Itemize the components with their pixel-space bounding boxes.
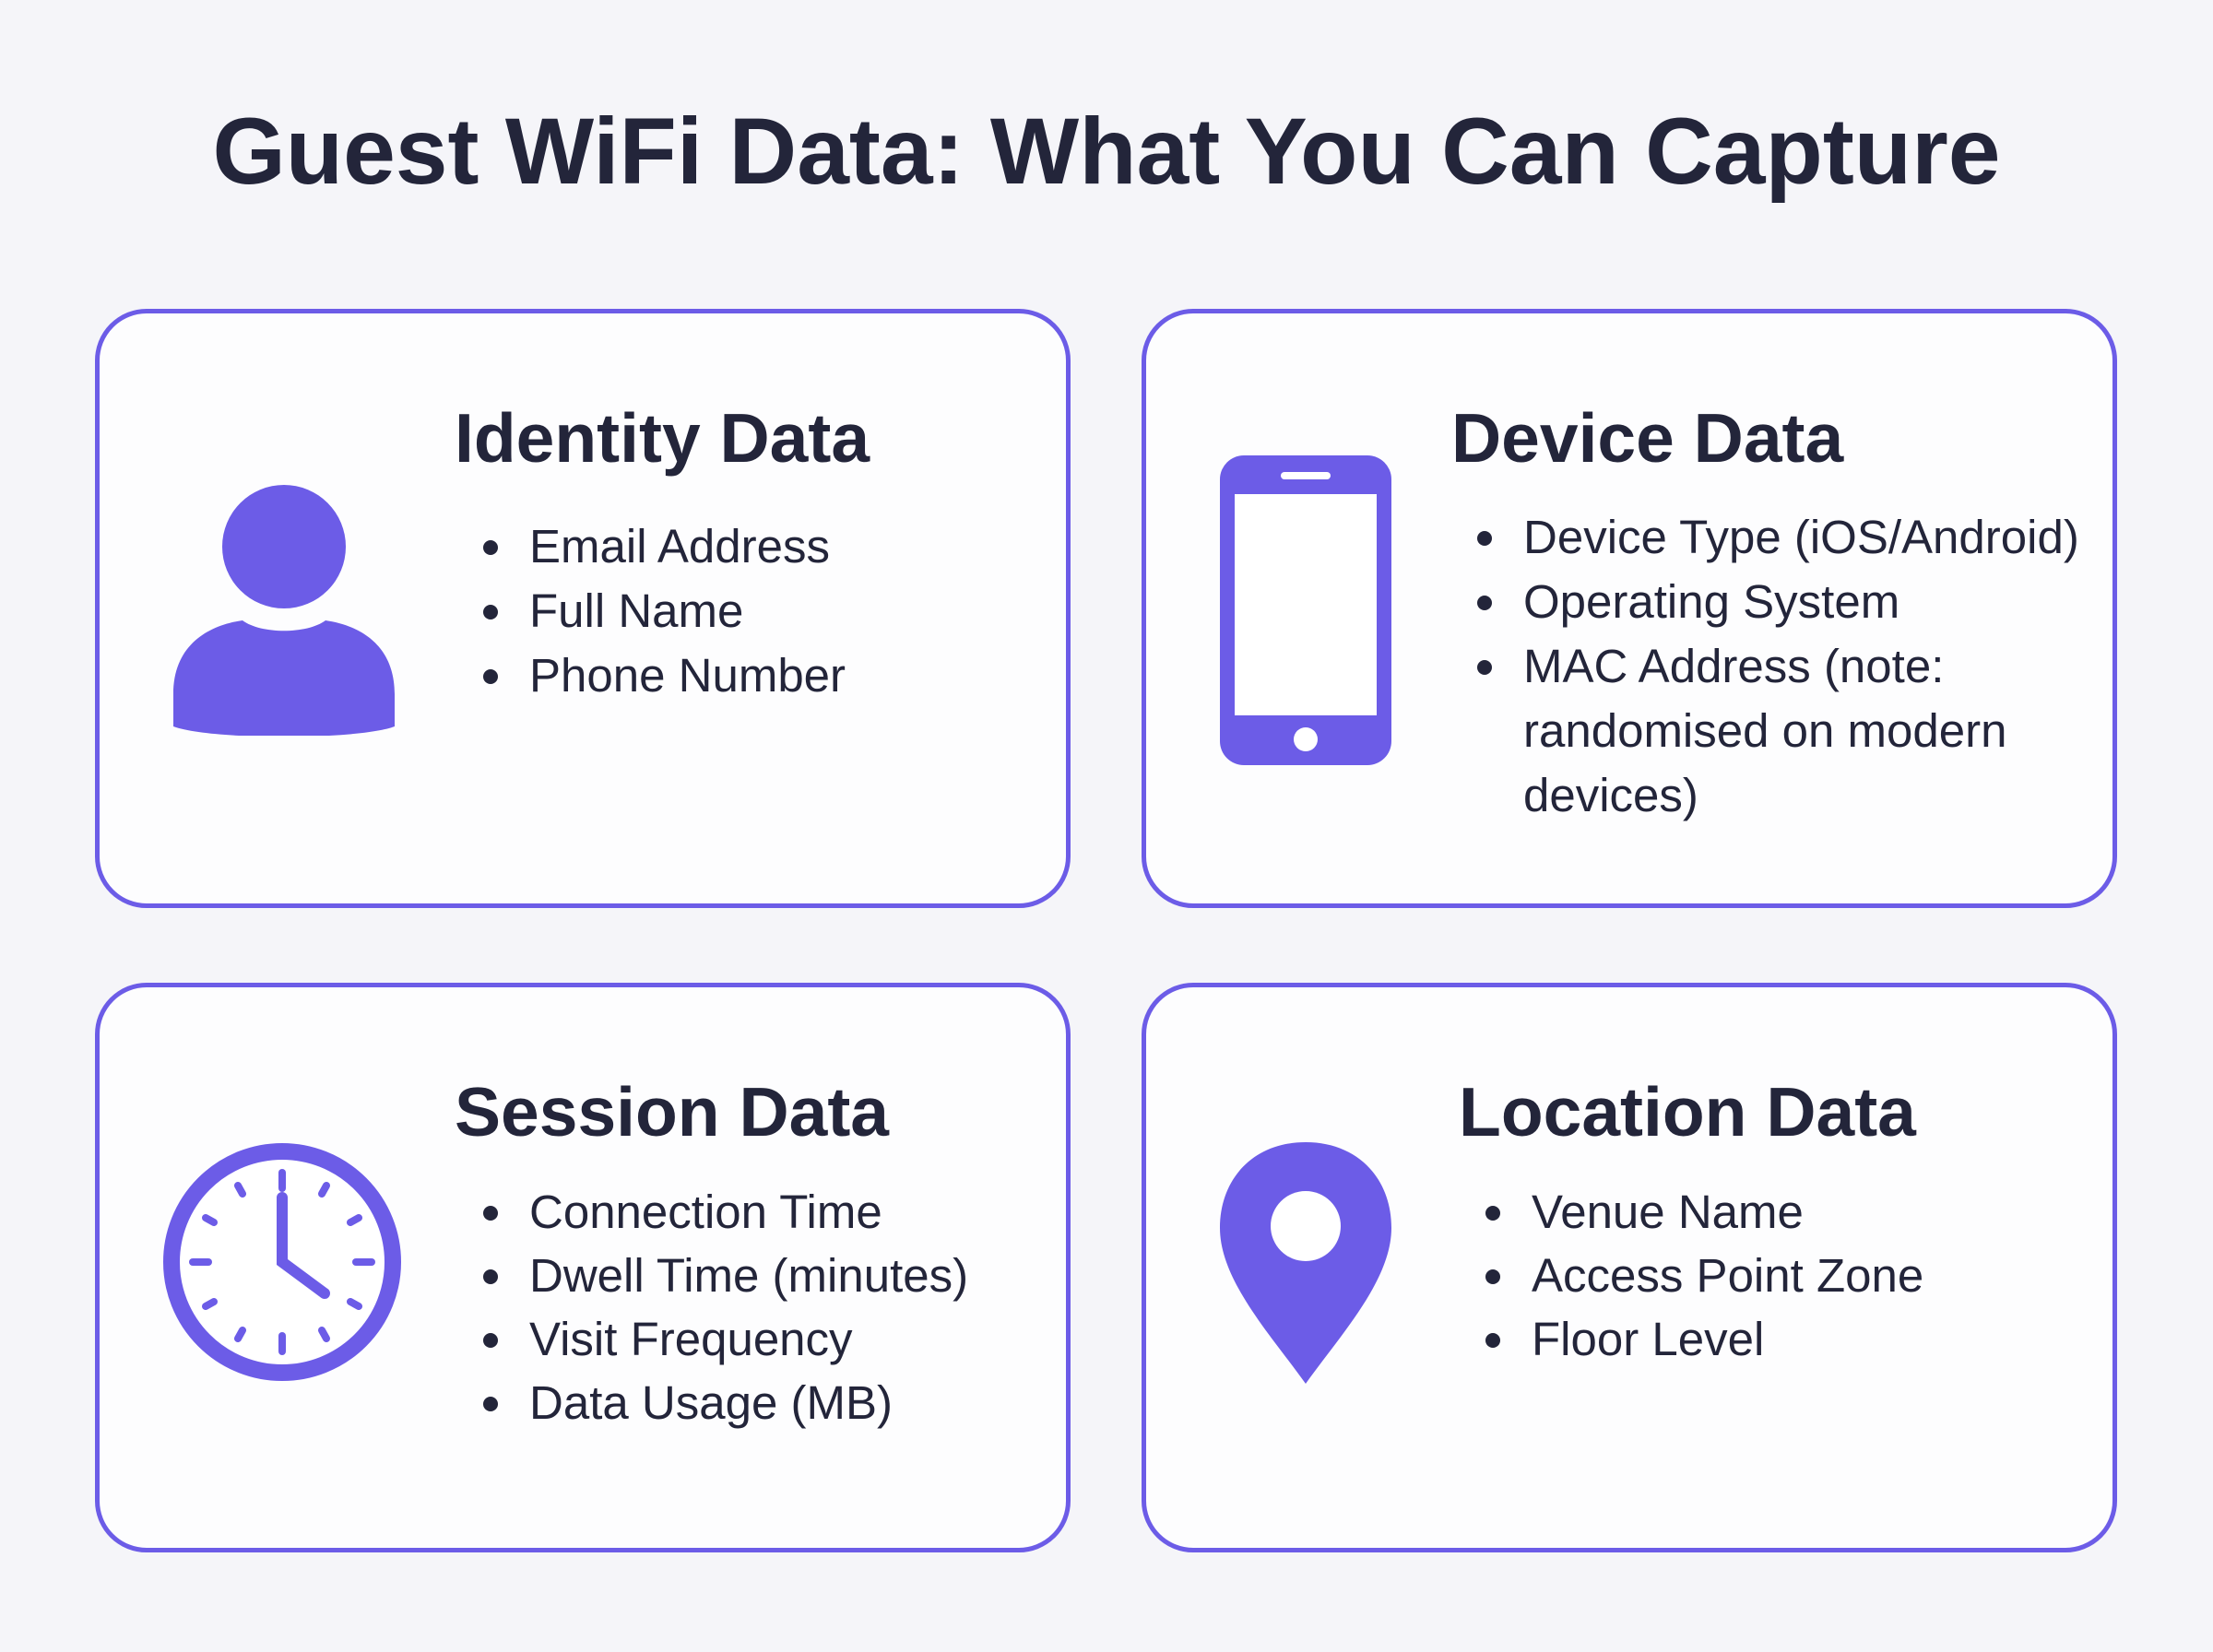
title: Guest WiFi Data: What You Can Capture xyxy=(212,99,2001,204)
heading: location: Location Data xyxy=(1459,1073,1916,1150)
panel: location xyxy=(1142,983,2117,1552)
icon: map pin xyxy=(1220,1142,1391,1384)
list: device xyxy=(1477,511,2079,821)
list: session: Connection Time xyxy=(529,1186,882,1238)
panel: identity xyxy=(95,309,1071,908)
list: session: Visit Frequency xyxy=(529,1313,853,1365)
list: identity: Full Name xyxy=(529,584,743,637)
heading: session: Session Data xyxy=(455,1073,889,1150)
list: device: MAC Address (note: xyxy=(1523,640,1944,692)
icon: person xyxy=(173,485,395,736)
heading: identity: Identity Data xyxy=(455,399,870,477)
list: device: randomised on modern xyxy=(1523,704,2006,757)
list: device: Operating System xyxy=(1523,575,1899,628)
list: session: Data Usage (MB) xyxy=(529,1376,893,1429)
list: identity xyxy=(483,520,846,702)
icon: phone xyxy=(1220,455,1391,765)
list: device: devices) xyxy=(1523,769,1698,821)
panel: device xyxy=(1142,309,2117,908)
list: session: Dwell Time (minutes) xyxy=(529,1249,968,1302)
list: location: Floor Level xyxy=(1532,1313,1764,1365)
heading: device: Device Data xyxy=(1451,399,1843,477)
list: location: Venue Name xyxy=(1532,1186,1804,1238)
list: location: Access Point Zone xyxy=(1532,1249,1923,1302)
list: identity: Phone Number xyxy=(529,649,846,702)
list: session xyxy=(483,1186,968,1429)
list: location xyxy=(1485,1186,1923,1365)
panel: session xyxy=(95,983,1071,1552)
list: identity: Email Address xyxy=(529,520,830,572)
list: device: Device Type (iOS/Android) xyxy=(1523,511,2079,563)
icon: clock xyxy=(163,1143,401,1381)
